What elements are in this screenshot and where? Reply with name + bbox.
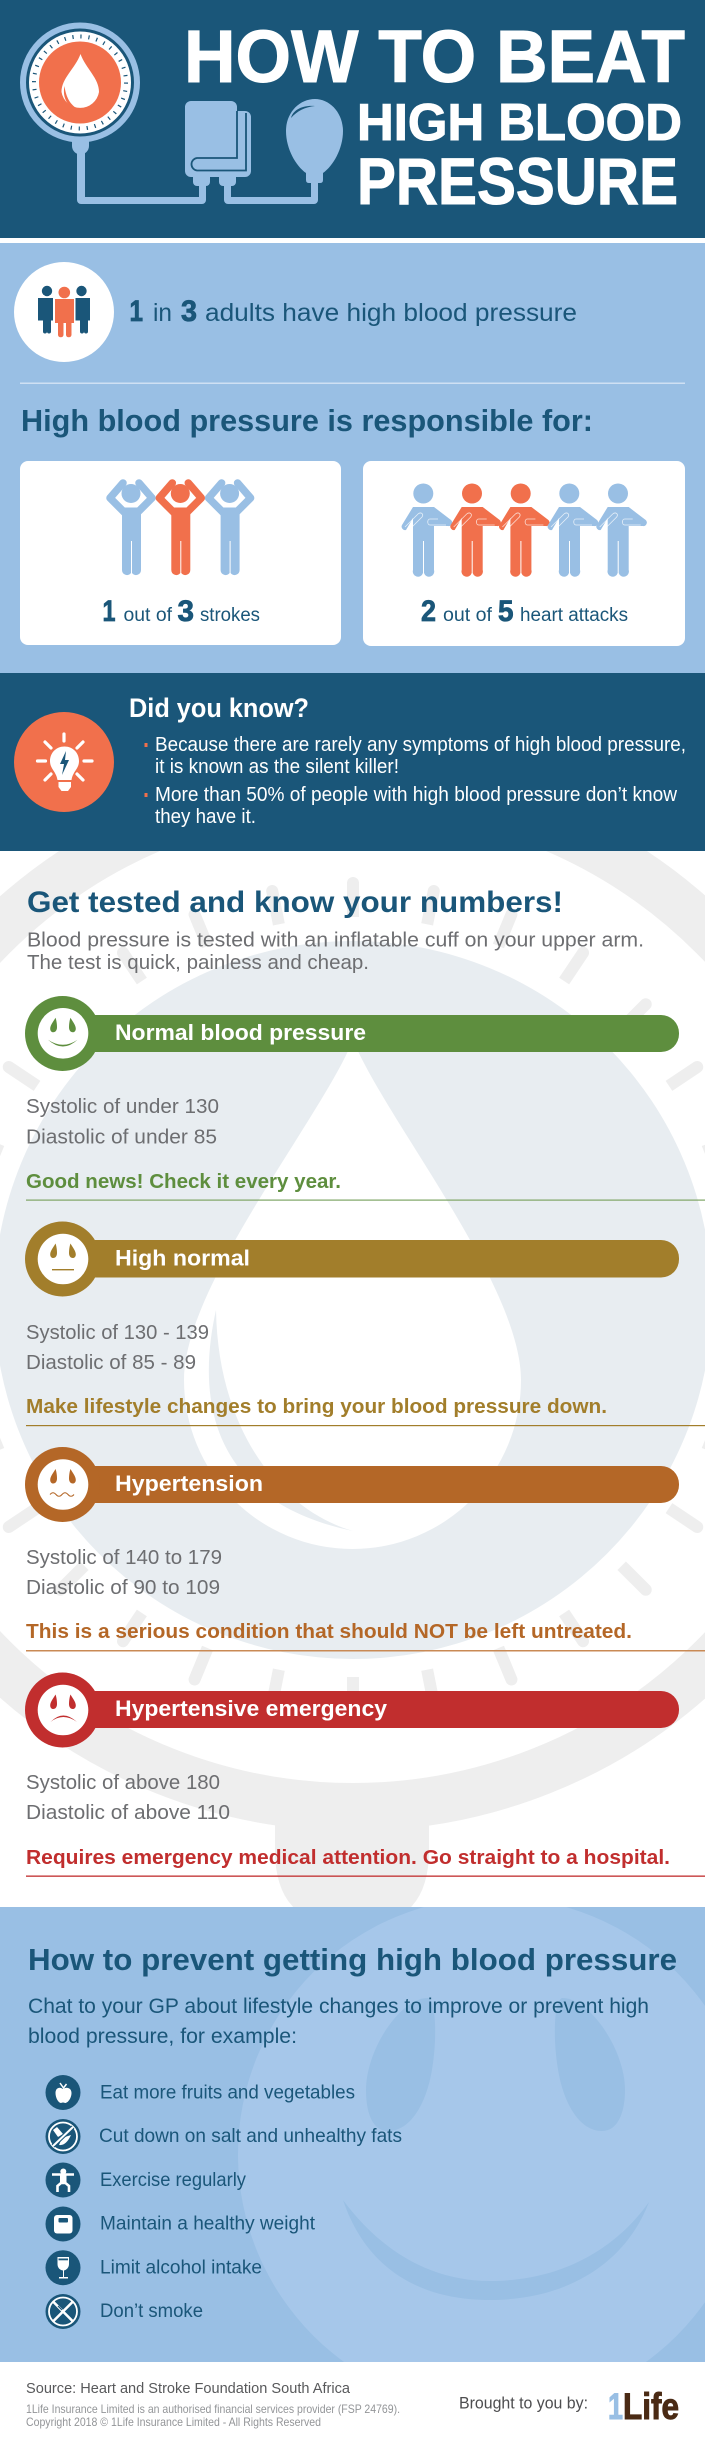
bullets: facts: they have it. <box>155 806 256 828</box>
title: HIGH BLOOD <box>357 94 682 152</box>
list item: exercise: Exercise regularly <box>100 2169 246 2191</box>
readings: emergency: Systolic of above 180 <box>26 1772 220 1794</box>
readings: normal <box>26 1096 219 1148</box>
bullets: facts: it is known as the silent killer! <box>155 756 399 778</box>
icon: cuff and pump tubing <box>77 99 343 204</box>
advice: high normal: Make lifestyle changes to bring your blood pressure down. <box>26 1395 607 1418</box>
title <box>184 15 685 218</box>
readings: hypertension <box>26 1547 222 1599</box>
list item: salt <box>46 2119 402 2154</box>
icon: worried face <box>38 1459 88 1510</box>
text: test description: Blood pressure is tested with an inflatable cuff on your upper arm. <box>27 930 644 952</box>
legal text <box>26 2402 400 2429</box>
card: heart attacks <box>363 461 685 646</box>
panel: did you know <box>0 673 705 851</box>
icon: three people <box>14 262 114 362</box>
icon: happy face <box>38 1008 88 1059</box>
text: 1 in 3 adults: 3 <box>181 295 197 328</box>
advice: emergency: Requires emergency medical attention. Go straight to a hospital. <box>26 1846 670 1869</box>
bullets: facts: More than 50% of people with high blood pressure don’t know <box>155 784 678 806</box>
list item: alcohol: Limit alcohol intake <box>100 2256 262 2278</box>
bullets: facts <box>144 734 686 828</box>
advice: hypertension: This is a serious condition that should NOT be left untreated. <box>26 1620 632 1643</box>
heading: prevention: How to prevent getting high blood pressure <box>28 1942 677 1977</box>
header bar: hypertension: Hypertension <box>115 1471 263 1496</box>
text: 2 out of 5 heart attacks: 5 <box>498 595 514 628</box>
icon: neutral face <box>38 1234 88 1284</box>
list item: salt: Cut down on salt and unhealthy fats <box>99 2125 402 2147</box>
header banner <box>0 0 705 238</box>
panel: prevention <box>0 1907 705 2362</box>
icon: sad face <box>38 1685 88 1735</box>
panel: normal blood pressure <box>25 996 705 1201</box>
list item: fruit: Eat more fruits and vegetables <box>100 2082 355 2104</box>
text: test description: The test is quick, painless and cheap. <box>27 952 369 974</box>
panel: high normal <box>25 1222 705 1426</box>
text: 2 out of 5 heart attacks: heart attacks <box>520 605 628 626</box>
text: 2 out of 5 heart attacks: out of <box>443 605 493 626</box>
readings: normal: Systolic of under 130 <box>26 1096 219 1118</box>
footer <box>0 2362 705 2448</box>
icon: heart attack figures <box>402 484 647 577</box>
readings: high normal: Diastolic of 85 - 89 <box>26 1352 196 1374</box>
legal text: Copyright 2018 © 1Life Insurance Limited - All Rights Reserved <box>26 2415 321 2429</box>
icon: stroke figures <box>110 483 251 575</box>
readings: emergency: Diastolic of above 110 <box>26 1802 230 1824</box>
list item: fruit <box>46 2075 355 2110</box>
readings: high normal <box>26 1322 209 1374</box>
header bar: high normal: High normal <box>115 1246 250 1270</box>
text: 2 out of 5 heart attacks <box>421 595 628 628</box>
bullets: facts: Because there are rarely any symptoms of high blood pressure, <box>155 734 686 756</box>
legal text: 1Life Insurance Limited is an authorised financial services provider (FSP 24769). <box>26 2402 400 2416</box>
header bar: emergency <box>25 1672 679 1748</box>
watermark: smiley <box>238 1907 705 2362</box>
list item: alcohol <box>46 2250 262 2285</box>
text: 1 out of 3 strokes: out of <box>124 605 173 626</box>
readings: high normal: Systolic of 130 - 139 <box>26 1322 209 1344</box>
panel: statistics <box>0 243 705 673</box>
icon: light bulb <box>14 712 114 812</box>
header bar: normal: Normal blood pressure <box>115 1020 366 1045</box>
readings: emergency <box>26 1772 230 1824</box>
logo: 1Life: Life <box>623 2386 679 2427</box>
readings: normal: Diastolic of under 85 <box>26 1126 217 1148</box>
text: 1 in 3 adults: in <box>153 299 172 327</box>
text: 2 out of 5 heart attacks: 2 <box>421 595 436 628</box>
list item: smoking <box>46 2294 203 2329</box>
text: 1 out of 3 strokes: strokes <box>200 605 260 626</box>
card: strokes <box>20 461 341 645</box>
text: 1 in 3 adults <box>130 295 577 328</box>
text: 1 out of 3 strokes <box>102 595 260 628</box>
text: 1 out of 3 strokes: 3 <box>178 595 194 628</box>
heading: did you know: Did you know? <box>129 693 309 723</box>
watermark: gauge background <box>0 787 705 1925</box>
list item: smoking: Don’t smoke <box>100 2300 203 2322</box>
text: test description <box>27 930 644 974</box>
list item: weight <box>46 2206 316 2242</box>
heading: get tested: Get tested and know your numbers! <box>27 886 563 919</box>
logo: 1Life <box>608 2386 679 2427</box>
heading: responsible for: High blood pressure is responsible for: <box>21 403 593 438</box>
text: 1 in 3 adults: adults have high blood pressure <box>205 299 577 327</box>
text: prevention intro: blood pressure, for example: <box>28 2025 297 2048</box>
text: prevention intro: Chat to your GP about lifestyle changes to improve or prevent high <box>28 1995 649 2018</box>
readings: hypertension: Diastolic of 90 to 109 <box>26 1577 220 1599</box>
header bar: normal <box>25 996 679 1071</box>
panel: hypertension <box>25 1447 705 1652</box>
icon: blood pressure gauge <box>23 26 137 154</box>
brought to you by: Brought to you by: <box>459 2394 588 2412</box>
source: Source: Heart and Stroke Foundation South Africa <box>26 2380 351 2397</box>
title: HOW TO BEAT <box>184 15 685 98</box>
advice: normal: Good news! Check it every year. <box>26 1170 341 1193</box>
header bar: high normal <box>25 1222 679 1296</box>
text: prevention intro <box>28 1995 649 2048</box>
text: 1 in 3 adults: 1 <box>130 295 143 328</box>
text: 1 out of 3 strokes: 1 <box>102 595 116 628</box>
header bar: hypertension <box>25 1447 679 1522</box>
logo: 1Life: 1 <box>608 2386 623 2427</box>
list item: exercise <box>46 2162 246 2198</box>
readings: hypertension: Systolic of 140 to 179 <box>26 1547 222 1569</box>
panel: hypertensive emergency <box>25 1672 705 1877</box>
header bar: emergency: Hypertensive emergency <box>115 1696 387 1721</box>
list item: weight: Maintain a healthy weight <box>100 2213 316 2235</box>
